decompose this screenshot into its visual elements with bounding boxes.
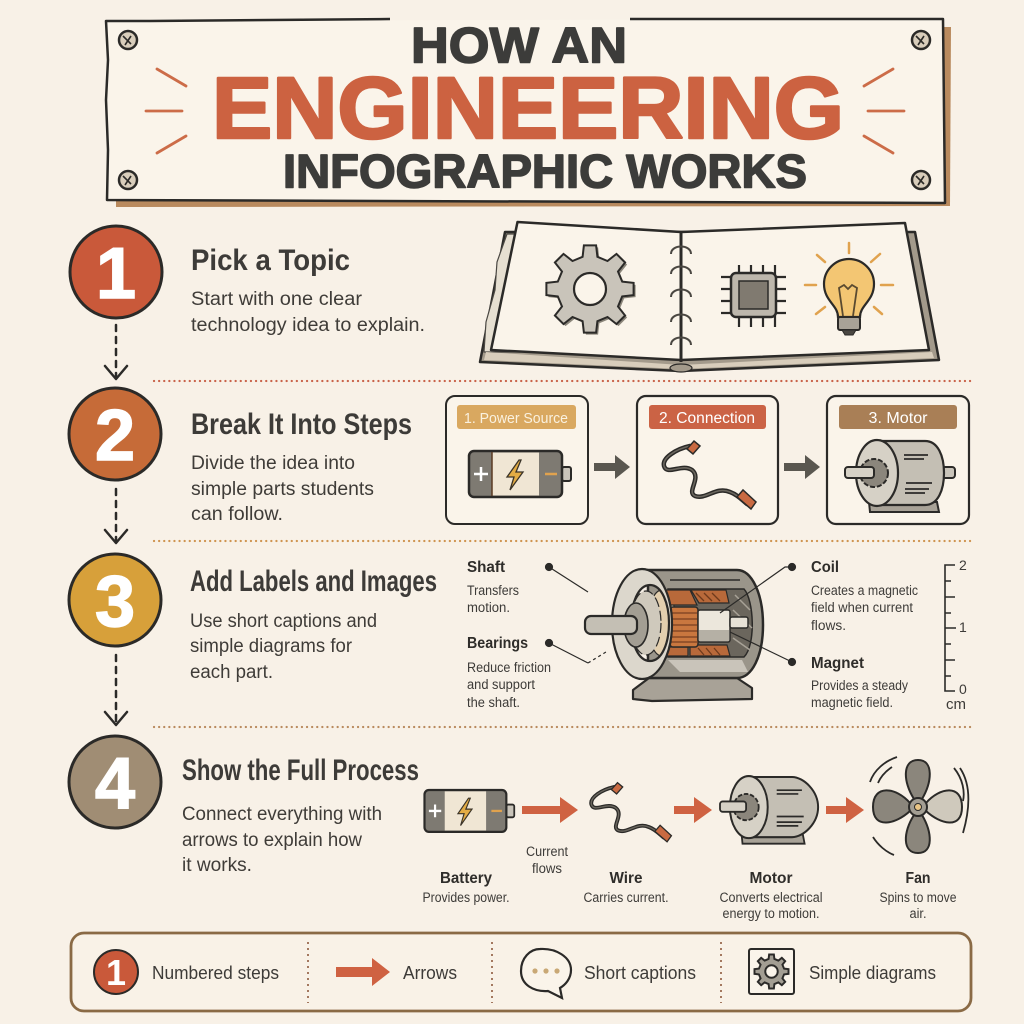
step 4 text [182, 754, 419, 876]
step 1 text: Start with one clear [191, 289, 363, 310]
icon: fan [870, 757, 968, 855]
label: magnet: Provides a steady [811, 678, 908, 693]
step 1 number badge [70, 226, 162, 318]
caption: motor: Converts electrical [720, 890, 822, 905]
step 3 number badge [69, 554, 161, 646]
scale ruler: 1 [959, 619, 967, 635]
step 4 number badge: 4 [95, 744, 135, 824]
title banner: INFOGRAPHIC WORKS [283, 144, 807, 198]
label: magnet: Magnet [811, 655, 865, 672]
step 4 number badge [69, 736, 161, 828]
arrow: step 3 to step 4 [105, 655, 127, 725]
step 2 text: Divide the idea into [191, 453, 355, 474]
caption: battery [422, 870, 510, 905]
label: coil: Creates a magnetic [811, 583, 918, 598]
label: motor: 3. Motor [868, 410, 928, 427]
label: current flows: Current [526, 844, 568, 859]
icon: light bulb [805, 243, 893, 335]
step 2 text [191, 408, 412, 525]
label: shaft [467, 559, 519, 615]
icon: gear [546, 245, 636, 335]
legend: arrows: Arrows [403, 963, 457, 983]
icon: motor [720, 776, 818, 844]
scale ruler: cm [946, 696, 966, 713]
caption: motor: Motor [750, 870, 792, 887]
legend: numbered steps: 1 [106, 952, 126, 993]
caption: wire: Carries current. [584, 890, 668, 905]
panel: connection [637, 396, 778, 524]
caption: motor [720, 870, 822, 921]
legend: short captions [521, 949, 696, 998]
title banner: ENGINEERING [212, 60, 844, 157]
arrow: battery to wire [522, 797, 578, 823]
icon: battery [424, 790, 514, 832]
label: connection: 2. Connection [659, 410, 755, 427]
step 1 number badge: 1 [96, 234, 136, 314]
legend: short captions: Short captions [584, 963, 696, 983]
label: shaft: Shaft [467, 559, 506, 576]
icon: motor [845, 440, 955, 512]
notebook [480, 222, 939, 372]
label: connection [649, 405, 766, 429]
label: shaft: Transfers [467, 583, 519, 598]
scale ruler: 0 [959, 681, 967, 697]
label: bearings: Bearings [467, 635, 528, 652]
full process flow [422, 757, 968, 921]
step 2 number badge [69, 388, 161, 480]
label: coil: Coil [811, 559, 839, 576]
label: bearings: Reduce friction [467, 660, 551, 675]
label: current flows: flows [532, 861, 562, 876]
caption: fan: air. [910, 906, 926, 921]
arrow: wire to motor [674, 797, 712, 823]
step 4 text: arrows to explain how [182, 830, 362, 851]
step 3 text: Add Labels and Images [190, 565, 437, 598]
icon: wire [591, 783, 671, 842]
label: power source: 1. Power Source [464, 410, 568, 427]
step 1 text: Pick a Topic [191, 244, 350, 277]
title banner [106, 18, 951, 207]
step 4 text: it works. [182, 855, 252, 876]
panel: motor [827, 396, 969, 524]
step 3 text: Use short captions and [190, 611, 377, 632]
icon: battery [469, 451, 571, 497]
step 1 text: technology idea to explain. [191, 315, 425, 336]
step 1 text [191, 244, 425, 336]
label: shaft: motion. [467, 600, 510, 615]
step 3 text: each part. [190, 662, 273, 683]
scale ruler [945, 557, 967, 713]
icon: microchip [721, 265, 786, 327]
illustration: open notebook with gear, chip and bulb [480, 222, 939, 372]
caption: battery: Battery [440, 870, 492, 887]
panel: power source [446, 396, 588, 524]
label: power source [457, 405, 576, 429]
caption: fan [880, 870, 956, 921]
legend: numbered steps: Numbered steps [152, 963, 279, 983]
step 3 text [190, 565, 437, 683]
step 4 text: Show the Full Process [182, 754, 419, 787]
caption: wire [584, 870, 668, 905]
label: magnet: magnetic field. [811, 695, 893, 710]
step 3 text: simple diagrams for [190, 636, 353, 657]
label: bearings: and support [467, 677, 535, 692]
step 4 text: Connect everything with [182, 804, 382, 825]
caption: wire: Wire [610, 870, 643, 887]
caption: fan: Fan [906, 870, 930, 887]
label: coil [811, 559, 918, 633]
arrow: source to connection [594, 455, 630, 479]
step 2 text: can follow. [191, 504, 283, 525]
labelled motor cutaway diagram [467, 557, 967, 713]
label: motor [839, 405, 957, 429]
step 2 text: Break It Into Steps [191, 408, 412, 441]
label: coil: flows. [811, 618, 846, 633]
label: bearings: the shaft. [467, 695, 520, 710]
step 3 number badge: 3 [95, 562, 135, 642]
label: current flows [526, 844, 568, 876]
step 2 number badge: 2 [95, 396, 135, 476]
scale ruler: 2 [959, 557, 967, 573]
legend panel [71, 933, 971, 1011]
legend: simple diagrams [749, 949, 936, 994]
legend: simple diagrams: Simple diagrams [809, 963, 936, 983]
step 2 text: simple parts students [191, 479, 374, 500]
arrow: step 2 to step 3 [105, 489, 127, 543]
legend: numbered steps [94, 950, 279, 994]
callout lines [546, 564, 796, 666]
cutaway motor [585, 569, 763, 701]
caption: battery: Provides power. [422, 890, 510, 905]
label: coil: field when current [811, 600, 913, 615]
icon: wire [664, 441, 756, 509]
caption: fan: Spins to move [880, 890, 956, 905]
title banner: HOW AN [411, 18, 627, 74]
arrow: motor to fan [826, 797, 864, 823]
label: bearings [467, 635, 551, 710]
arrow: step 1 to step 2 [105, 325, 127, 379]
arrow: connection to motor [784, 455, 820, 479]
caption: motor: energy to motion. [722, 906, 820, 921]
label: magnet [811, 655, 908, 710]
legend: arrows [336, 958, 457, 986]
